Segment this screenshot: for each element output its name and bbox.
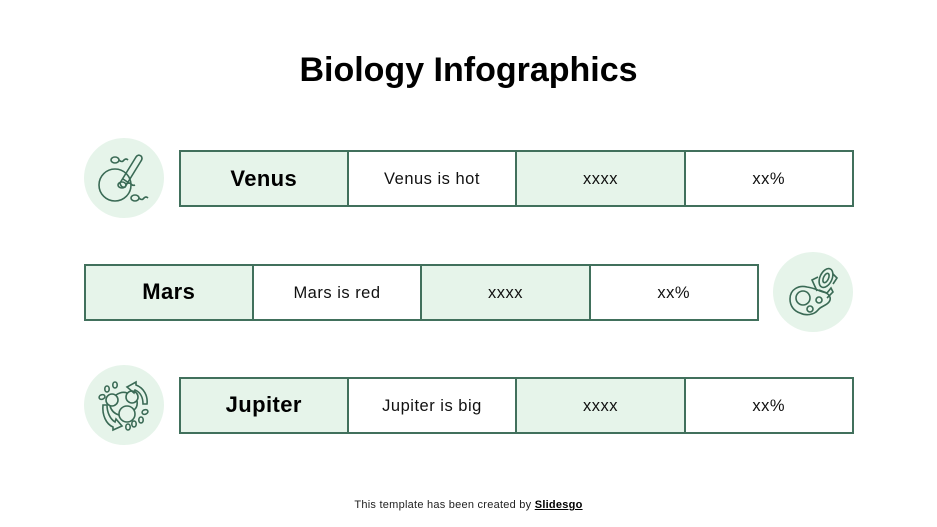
cell: Mars percent: xx% <box>657 284 690 302</box>
cell: Mars value: xxxx <box>488 284 523 302</box>
cell: Venus value <box>517 152 686 205</box>
cell: Venus name: Venus <box>230 166 297 190</box>
cell: Jupiter name <box>180 378 349 432</box>
cell: Jupiter value: xxxx <box>583 396 618 414</box>
cell: Jupiter percent: xx% <box>752 396 785 414</box>
cell: Jupiter description: Jupiter is big <box>382 396 482 414</box>
row: Jupiter <box>178 376 854 434</box>
row: Venus <box>178 150 854 207</box>
cell: Mars description <box>254 266 422 318</box>
cell: Jupiter value <box>517 378 686 432</box>
cell: Mars name: Mars <box>142 279 195 304</box>
cell: Jupiter name: Jupiter <box>226 392 302 417</box>
icon: cell cycle <box>84 365 164 445</box>
cell: Mars value <box>422 266 591 318</box>
cell: Venus description: Venus is hot <box>384 170 480 188</box>
cell: Mars description: Mars is red <box>293 284 381 302</box>
cell: Venus percent: xx% <box>752 170 785 188</box>
footer credit: This template has been created by Slidesgo <box>354 499 583 511</box>
title: Biology Infographics <box>299 51 638 89</box>
cell: Jupiter description <box>349 378 517 432</box>
cell: Mars name <box>86 266 254 318</box>
icon: sperm and egg injection <box>84 138 164 218</box>
cell: Venus name <box>180 152 349 205</box>
cell: Venus value: xxxx <box>583 170 618 188</box>
cell: Venus description <box>349 152 517 205</box>
icon: dividing cell <box>773 252 853 332</box>
row: Mars <box>84 264 758 320</box>
